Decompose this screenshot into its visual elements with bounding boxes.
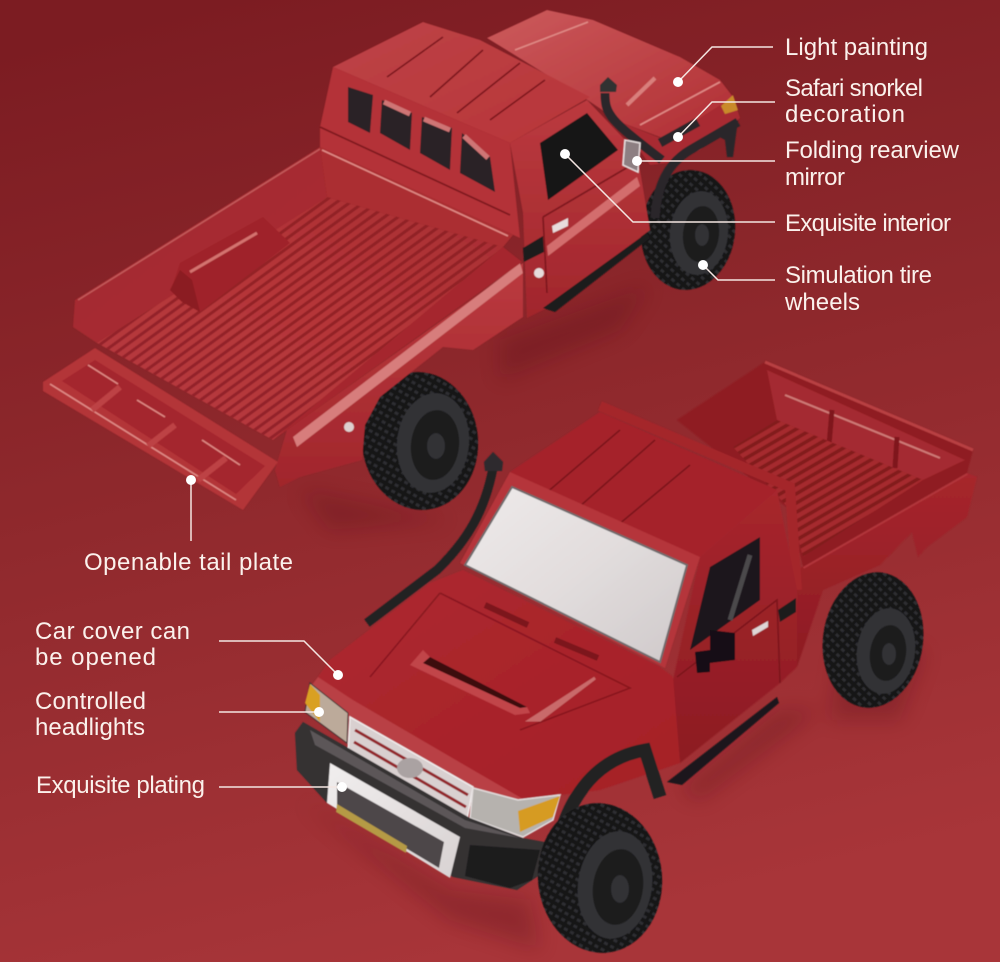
bumper opening — [337, 782, 444, 868]
dark bumper — [295, 722, 550, 890]
callout: car cover — [35, 618, 343, 680]
hood vents — [485, 605, 598, 658]
door latch — [778, 598, 796, 622]
fender flare — [655, 122, 738, 218]
callout: mirror: mirror — [785, 164, 845, 191]
badge — [534, 268, 544, 278]
front wheel — [530, 797, 670, 959]
door window — [540, 113, 618, 200]
bed floor — [97, 197, 503, 440]
callout: plating: Exquisite plating — [36, 772, 205, 799]
snorkel — [605, 93, 698, 160]
cab roof — [333, 22, 590, 143]
rear windows — [348, 87, 495, 192]
bottom pickup truck, front view — [295, 362, 977, 959]
bed left wall — [73, 147, 327, 343]
callout: headlights: headlights — [35, 714, 145, 741]
front fender panel — [620, 97, 740, 165]
tailgate — [43, 348, 278, 510]
floor ribs — [97, 197, 503, 440]
windshield — [465, 487, 687, 662]
callout: mirror: Folding rearview — [785, 137, 960, 164]
rear window frame — [320, 67, 520, 238]
callout: light painting: Light painting — [785, 34, 928, 61]
cab roof — [510, 412, 777, 557]
cab side with door — [510, 100, 650, 318]
bed right outer side — [275, 263, 523, 487]
front right wheel — [635, 165, 741, 295]
ground shadows — [300, 285, 925, 950]
callout: mirror — [632, 137, 960, 191]
callout: plating — [36, 772, 347, 799]
side step — [667, 697, 779, 785]
bed exterior side — [797, 473, 977, 667]
roof rail — [600, 406, 797, 590]
side window — [690, 537, 760, 650]
grille badge — [397, 758, 423, 778]
bed interior walls — [677, 362, 973, 567]
wheel arch flare — [556, 750, 660, 850]
wheel arch hump — [172, 217, 290, 312]
callout: interior — [560, 149, 951, 237]
door mirror — [695, 630, 735, 673]
bed right rail — [273, 247, 522, 440]
hood — [487, 10, 733, 140]
left headlight — [305, 683, 348, 743]
callout: light painting — [673, 34, 928, 87]
rear wheel — [814, 566, 932, 714]
chrome grille — [348, 717, 473, 820]
fender bracket — [716, 120, 738, 157]
door handle — [752, 621, 768, 636]
bed back wall — [320, 147, 513, 247]
indicator lamp — [721, 95, 738, 114]
bed floor ribs — [733, 420, 923, 557]
callout: tire: Simulation tire — [785, 262, 932, 289]
right headlight — [470, 788, 560, 837]
side step — [543, 233, 650, 312]
callout: interior: Exquisite interior — [785, 210, 951, 237]
callout: snorkel — [673, 75, 923, 142]
snorkel — [367, 468, 493, 623]
callout: tail plate — [84, 475, 293, 576]
cab side — [673, 490, 797, 763]
folding mirror — [623, 140, 640, 172]
callout: car cover: be opened — [35, 644, 156, 671]
callout: headlights: Controlled — [35, 688, 146, 715]
front lip of hood — [308, 677, 560, 818]
chrome bumper plate — [327, 763, 460, 878]
rear right wheel — [355, 366, 485, 516]
gold strip — [336, 804, 407, 853]
callout: tire — [698, 260, 932, 316]
callout: car cover: Car cover can — [35, 618, 190, 645]
top pickup truck, rear view — [43, 10, 741, 516]
callout: tire: wheels — [784, 289, 860, 316]
door handle — [552, 218, 568, 233]
bed floor — [733, 420, 923, 557]
door highlight stripe — [547, 177, 640, 256]
callout: tail plate: Openable tail plate — [84, 549, 293, 576]
black latch — [523, 236, 544, 262]
hood — [318, 570, 680, 803]
callout: headlights — [35, 688, 324, 741]
hood scoop — [410, 650, 530, 715]
windshield frame — [460, 472, 700, 668]
callout: snorkel: Safari snorkel — [785, 75, 923, 102]
callout: snorkel: decoration — [785, 101, 905, 128]
